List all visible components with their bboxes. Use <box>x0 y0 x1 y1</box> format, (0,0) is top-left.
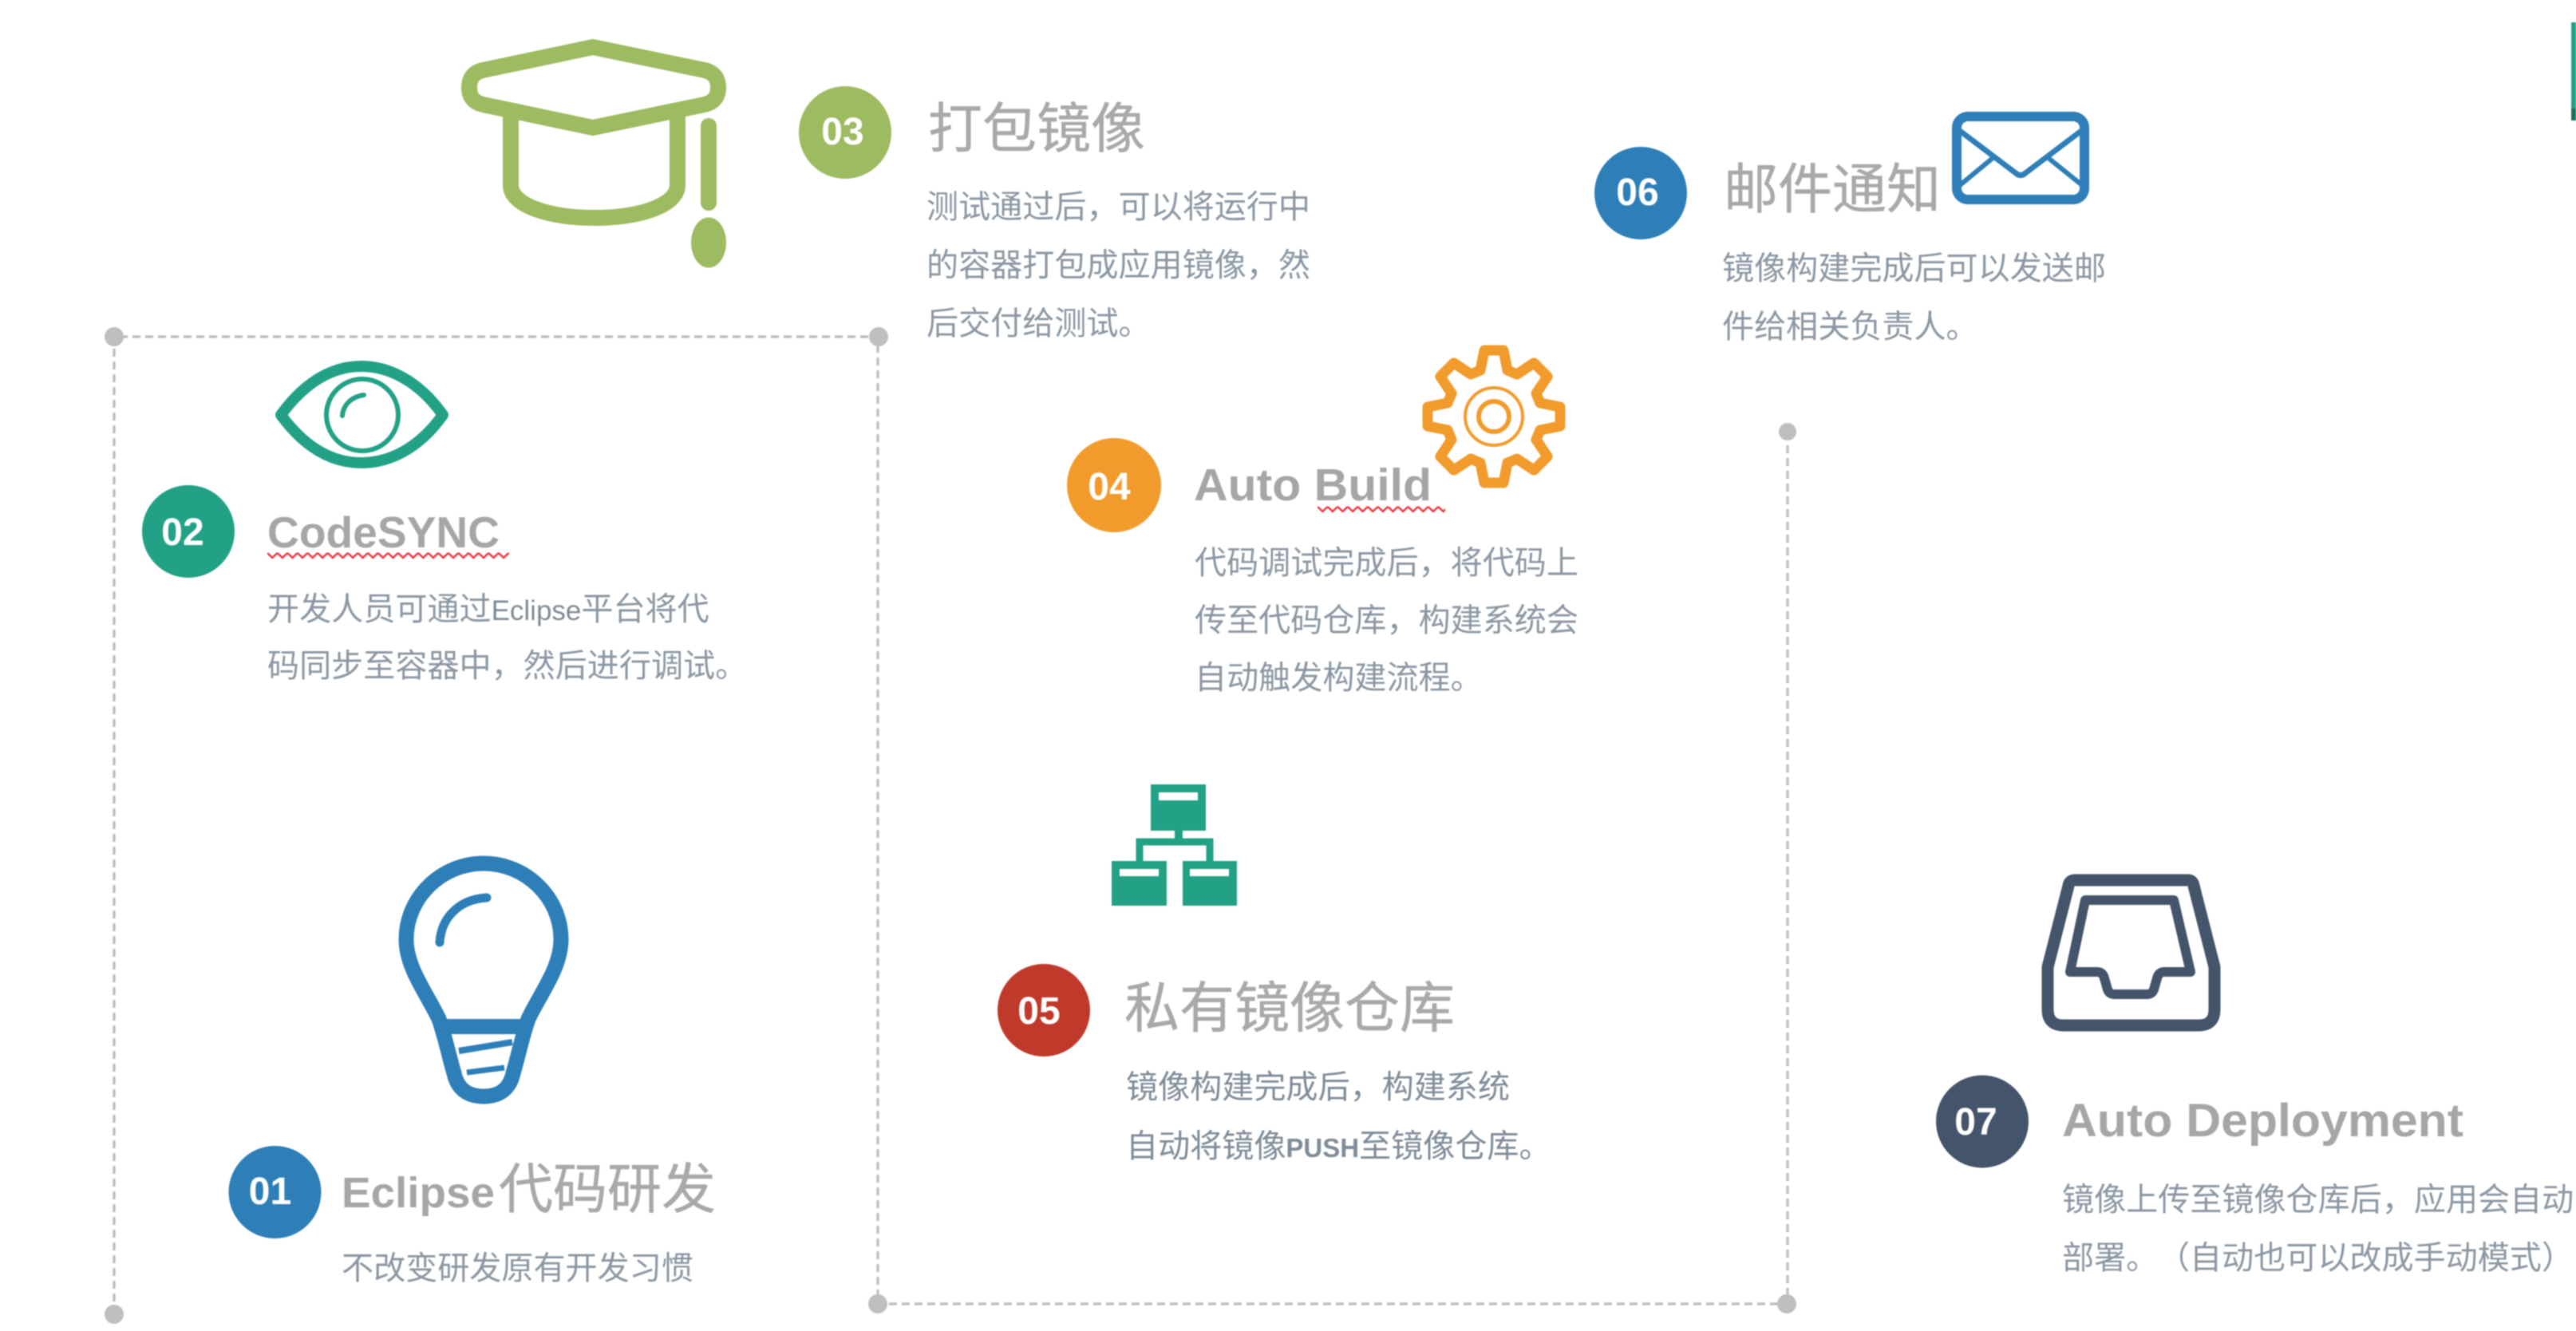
heading 01 <box>342 1159 716 1220</box>
description 02: 码同步至容器中，然后进行调试。 <box>267 649 747 684</box>
number badge 06: 06 <box>1616 172 1659 214</box>
heading 01: 代码研发 <box>499 1159 716 1220</box>
panel: step 03 package image <box>469 47 1310 342</box>
icon: hierarchy boxes <box>1112 784 1237 906</box>
number badge 02: 02 <box>161 511 204 554</box>
heading 01: Eclipse <box>342 1169 495 1217</box>
panel: step 04 Auto Build <box>1067 350 1578 696</box>
panel: step 07 Auto Deployment <box>1936 880 2574 1276</box>
description 02: 开发人员可通过Eclipse平台将代 <box>267 592 709 627</box>
spelling squiggle 02 <box>267 551 509 559</box>
icon: eye <box>281 366 443 463</box>
description 07: 部署。 <box>2062 1241 2158 1276</box>
number badge 04 <box>1067 438 1161 532</box>
number badge 07 <box>1936 1076 2029 1168</box>
description 03 <box>926 190 1310 342</box>
panel: step 01 Eclipse development <box>228 863 716 1286</box>
description 07: 镜像上传至镜像仓库后，应用会自动 <box>2062 1183 2574 1218</box>
number badge 01: 01 <box>249 1171 291 1213</box>
icon: gear <box>1428 350 1560 483</box>
edge accent bar <box>2571 22 2576 120</box>
heading 06: 邮件通知 <box>1724 160 1941 220</box>
heading 02: CodeSYNC <box>267 508 500 557</box>
number badge 03: 03 <box>821 111 864 153</box>
number badge 07: 07 <box>1954 1101 1997 1143</box>
description 06 <box>1722 251 2106 345</box>
description 04: 代码调试完成后，将代码上 <box>1195 546 1578 581</box>
number badge 01 <box>228 1146 321 1238</box>
icon: envelope <box>1957 117 2084 199</box>
description 05 <box>1126 1070 1551 1164</box>
description 07: 自动也可以改成手动模式） <box>2190 1241 2574 1276</box>
description 04: 自动触发构建流程。 <box>1195 661 1483 696</box>
dashed connector frame <box>114 337 1788 1314</box>
heading 07: Auto Deployment <box>2062 1095 2463 1147</box>
description 07: （ <box>2158 1241 2190 1276</box>
panel: step 06 mail notification <box>1594 117 2106 345</box>
heading 03: 打包镜像 <box>928 99 1145 160</box>
icon: inbox tray <box>2048 880 2214 1025</box>
description 02 <box>267 592 747 684</box>
description 06: 件给相关负责人。 <box>1722 310 1978 345</box>
number badge 05: 05 <box>1017 990 1061 1033</box>
description 03: 的容器打包成应用镜像，然 <box>926 248 1310 283</box>
description 07 <box>2062 1183 2574 1276</box>
number badge 06 <box>1594 147 1687 239</box>
number badge 03 <box>799 86 891 179</box>
heading 04: Auto Build <box>1194 460 1432 511</box>
description 06: 镜像构建完成后可以发送邮 <box>1722 251 2106 286</box>
number badge 02 <box>142 485 235 578</box>
description 04: 传至代码仓库，构建系统会 <box>1195 603 1578 638</box>
icon: light bulb <box>406 863 561 1096</box>
icon: graduation cap <box>469 47 726 268</box>
description 03: 测试通过后，可以将运行中 <box>926 190 1310 225</box>
description 04 <box>1195 546 1578 696</box>
panel: step 05 private image registry <box>998 784 1551 1164</box>
number badge 05 <box>998 964 1090 1057</box>
heading 05: 私有镜像仓库 <box>1124 978 1455 1039</box>
description 05: 镜像构建完成后，构建系统 <box>1126 1070 1510 1105</box>
spelling squiggle 04 <box>1318 505 1445 513</box>
description 05: 自动将镜像PUSH至镜像仓库。 <box>1126 1129 1551 1164</box>
panel: step 02 CodeSYNC <box>142 366 747 684</box>
number badge 04: 04 <box>1088 466 1131 508</box>
description 01: 不改变研发原有开发习惯 <box>342 1251 693 1286</box>
description 03: 后交付给测试。 <box>926 306 1151 342</box>
connector node dots <box>105 327 1796 1324</box>
